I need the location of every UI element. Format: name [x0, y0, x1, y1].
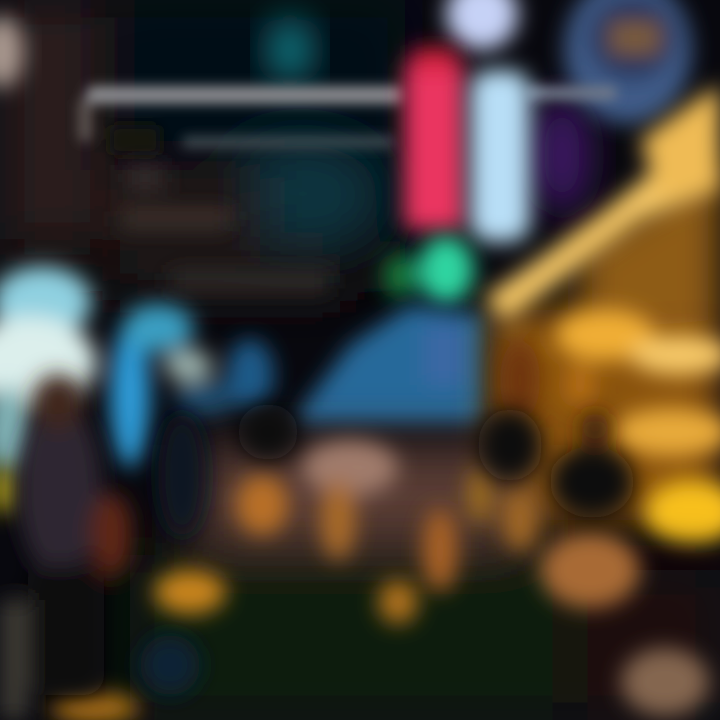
icon: beige lamp at top left: [0, 16, 24, 88]
icon: foreground person: [0, 374, 200, 720]
panel: light blue vertical banner: [470, 70, 530, 242]
icon: round blue sign at top right: [564, 0, 692, 124]
panel: left white and blue stall: [0, 266, 274, 474]
panel: red vertical banner: [404, 48, 464, 230]
panel: upper left dark backdrop: [0, 0, 405, 300]
panel: purple sign backdrop: [532, 97, 592, 213]
panel: blue tent roofs: [290, 305, 486, 424]
icon: teal glow: [268, 18, 312, 82]
heading: blurred title bars: [78, 86, 617, 155]
panel: lower crowd backdrop: [130, 445, 720, 720]
icon: lavender lantern at top: [446, 0, 518, 50]
text block: blurred subtitle lines: [120, 165, 330, 290]
icon: silhouettes of visitors: [158, 404, 634, 537]
icon: green lantern: [384, 236, 474, 304]
icon: orange and peach bokeh lights: [0, 440, 709, 720]
panel: gold stall highlights: [484, 80, 720, 544]
panel: gold market stall: [490, 160, 720, 520]
